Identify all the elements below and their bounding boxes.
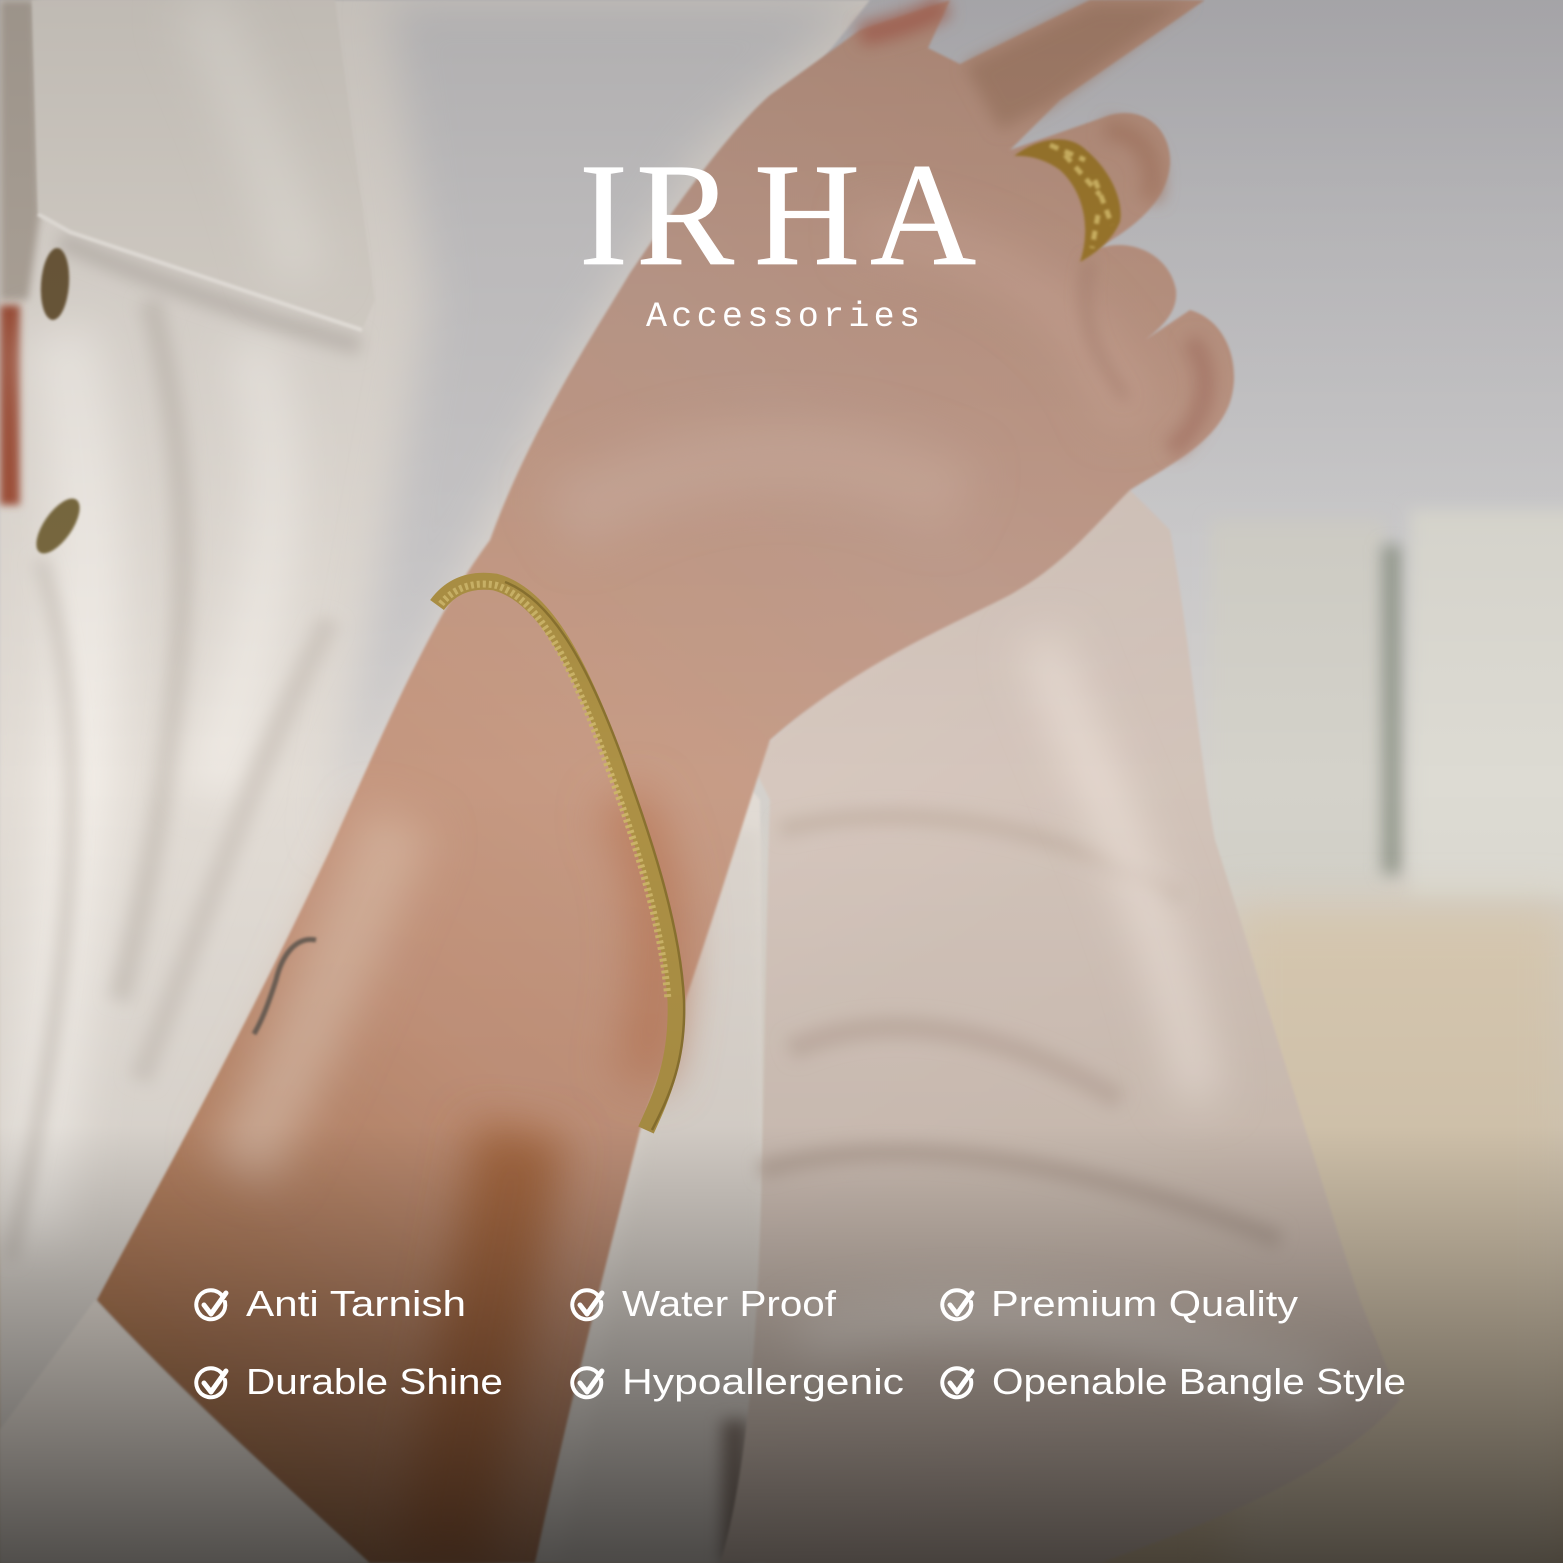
tattoo: heart outline: [254, 939, 316, 1034]
title: IRHA: IRHA: [579, 133, 976, 296]
icon: check: [572, 1290, 602, 1319]
feature: Water Proof: Water Proof: [622, 1283, 837, 1324]
icon: check: [942, 1368, 972, 1397]
icon: check: [942, 1290, 972, 1319]
icon: check: [572, 1368, 602, 1397]
feature: Anti Tarnish: [196, 1283, 466, 1324]
feature: Hypoallergenic: Hypoallergenic: [622, 1361, 904, 1402]
icon: check: [196, 1290, 226, 1319]
gold ring: [1014, 139, 1121, 262]
icon: check: [196, 1368, 226, 1397]
feature: Anti Tarnish: Anti Tarnish: [246, 1283, 466, 1324]
shirt buttons: [28, 247, 88, 560]
lower-left inner sleeve: [0, 1300, 370, 1563]
subtitle: Accessories: Accessories: [646, 297, 920, 337]
arm and hand: [97, 0, 1234, 1563]
rolled sleeve: [720, 470, 1400, 1563]
gold herringbone bracelet: [437, 581, 684, 1130]
white shirt body: [0, 0, 870, 1563]
collar: [32, 0, 375, 346]
feature: Premium Quality: Premium Quality: [991, 1283, 1298, 1324]
features list: [196, 1283, 1406, 1402]
feature: Durable Shine: Durable Shine: [246, 1361, 503, 1402]
feature: Openable Bangle Style: Openable Bangle Style: [992, 1361, 1406, 1402]
